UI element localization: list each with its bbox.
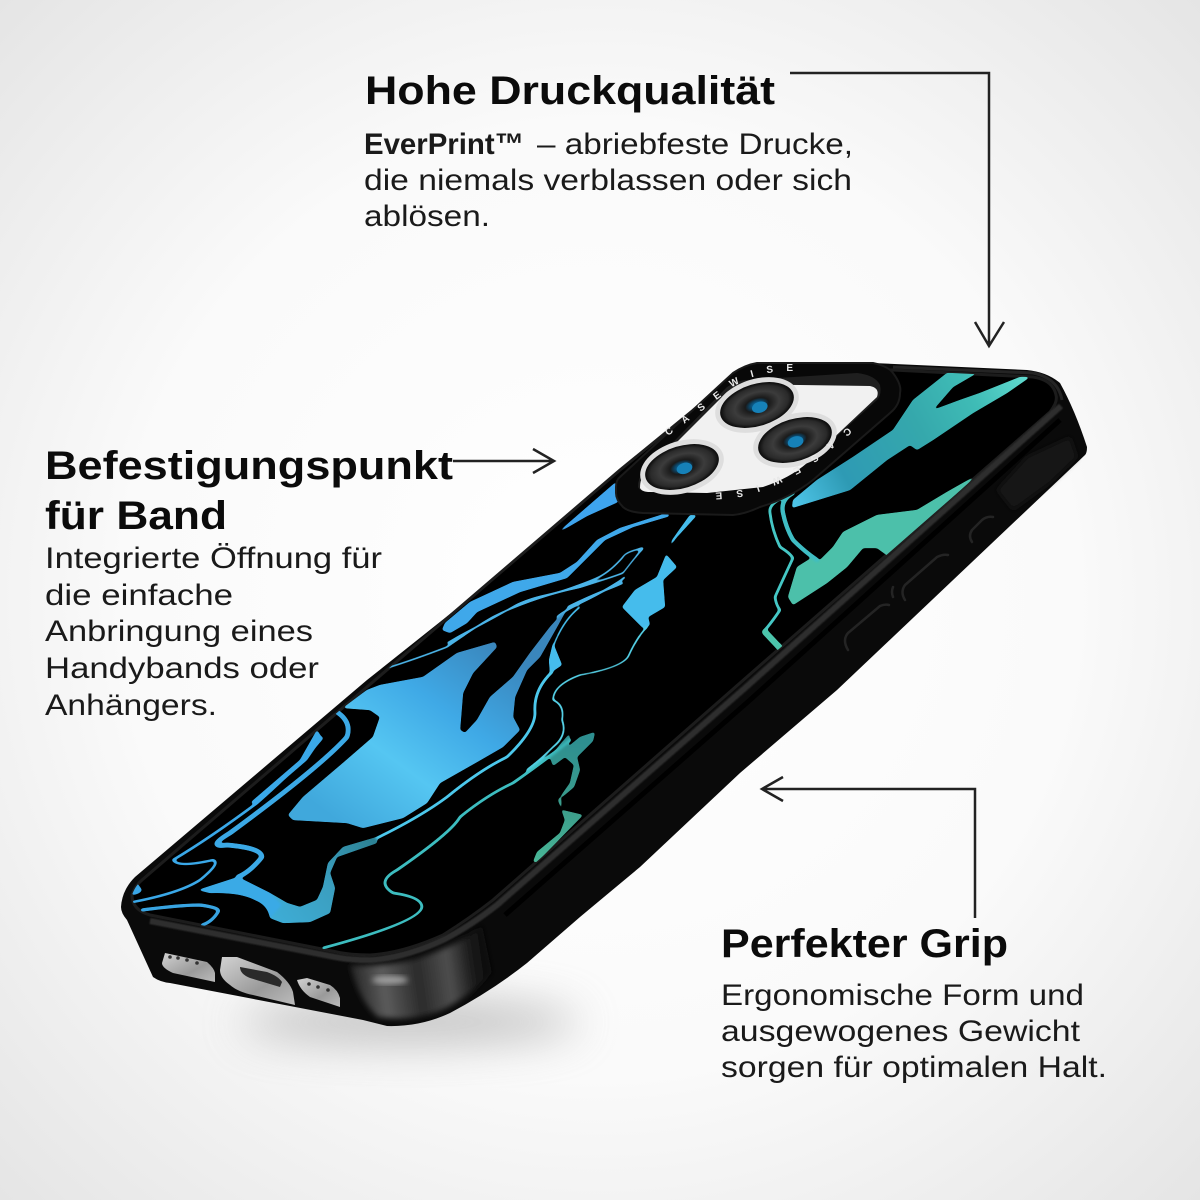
ring lettering bottom: CASEWISE <box>716 428 851 500</box>
heading: Befestigungspunkt für Band: Befestigungspunkt <box>45 444 453 488</box>
marble print <box>132 373 1030 948</box>
tear drop <box>549 643 562 673</box>
text: strap description: Handybands oder <box>45 652 319 685</box>
charging port <box>220 957 295 1005</box>
camera ring <box>616 363 900 515</box>
wedge beside camera <box>556 482 618 534</box>
text: grip description: Ergonomische Form und <box>721 979 1084 1012</box>
top teal band <box>792 373 1030 508</box>
heading: Perfekter Grip: Perfekter Grip <box>721 922 1008 966</box>
green band <box>788 475 977 605</box>
corner drop <box>132 884 142 895</box>
bumper highlight <box>372 976 408 984</box>
bottom speaker left <box>162 953 215 982</box>
teal strip lower <box>270 837 377 923</box>
text: EverPrint description: die niemals verblassen oder sich <box>364 164 852 197</box>
text: grip description: sorgen für optimalen Halt. <box>721 1051 1107 1084</box>
top-right corner rim <box>893 367 1062 400</box>
arrow: print quality <box>790 73 1004 346</box>
lens top <box>708 368 806 442</box>
bottom speaker right <box>297 978 340 1007</box>
dark back panel <box>132 370 1056 955</box>
side groove <box>505 420 1060 915</box>
callout: strap attachment <box>45 444 453 722</box>
text: EverPrint description: ablösen. <box>364 200 490 233</box>
text: strap description: Integrierte Öffnung für <box>45 542 382 575</box>
lens left <box>633 430 731 504</box>
case body <box>121 363 1087 1026</box>
text: strap description: Anbringung eines <box>45 615 313 648</box>
callout: print quality <box>364 69 853 233</box>
heading: Hohe Druckqualität: Hohe Druckqualität <box>365 69 775 113</box>
text: grip description: ausgewogenes Gewicht <box>721 1015 1081 1048</box>
blue blob <box>288 607 568 828</box>
text: EverPrint description <box>364 128 853 233</box>
text: strap description <box>45 542 382 722</box>
phone case <box>121 362 1087 1026</box>
top stripe thick part <box>250 730 322 803</box>
wave wedge <box>198 877 282 918</box>
under-camera strip <box>622 515 697 628</box>
text: EverPrint description: – abriebfeste Drucke, <box>537 128 853 161</box>
camera inner wall <box>638 373 881 493</box>
ring lettering top: CASEWISE <box>666 364 793 435</box>
side switch shape <box>997 437 1077 510</box>
side buttons <box>845 517 993 650</box>
phone shadow <box>240 1000 580 1044</box>
arrow: grip <box>762 777 975 918</box>
text: strap description: die einfache <box>45 579 233 612</box>
green blob <box>533 732 595 862</box>
callout: grip <box>721 922 1107 1084</box>
speaker holes <box>168 955 330 992</box>
text: grip description <box>721 979 1107 1084</box>
camera module <box>615 362 902 516</box>
arrow: strap attachment <box>453 449 554 473</box>
glossy bumper corner <box>350 925 492 1019</box>
text: EverPrint description: EverPrint™ <box>364 128 524 161</box>
heading: Befestigungspunkt für Band: für Band <box>45 494 227 538</box>
upper-left stripe <box>442 513 670 633</box>
lower-right rim highlight <box>150 406 1061 960</box>
text: strap description: Anhängers. <box>45 689 217 722</box>
marble lines <box>133 493 817 948</box>
camera glass <box>640 385 878 493</box>
heading: Befestigungspunkt für Band <box>45 444 453 538</box>
port opening <box>240 967 282 987</box>
lens right <box>746 403 844 477</box>
